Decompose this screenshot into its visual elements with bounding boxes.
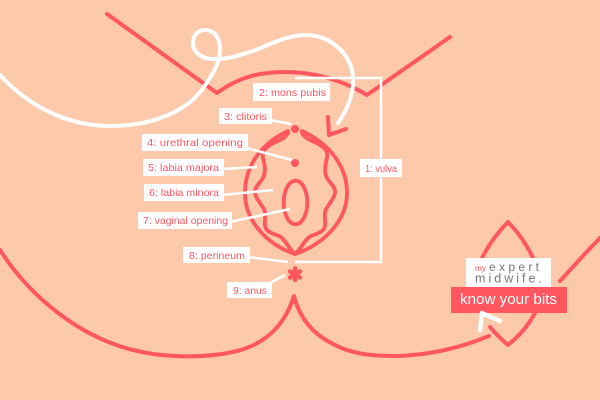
logo panel: my bbox=[475, 264, 486, 273]
label: 3 clitoris bbox=[219, 108, 272, 124]
label: 1 vulva bbox=[360, 159, 402, 177]
white swoosh arrow line bbox=[0, 30, 353, 126]
vaginal opening bbox=[284, 181, 307, 224]
label: 5 labia majora bbox=[143, 159, 224, 176]
outer labia outline bbox=[245, 131, 347, 254]
label: 7 vaginal opening bbox=[138, 212, 232, 229]
label: 2 mons pubis: 2: mons pubis bbox=[259, 87, 326, 99]
logo panel: expert bbox=[489, 260, 540, 274]
body outline: hips bbox=[107, 14, 450, 95]
arrowhead: red bbox=[328, 117, 346, 135]
white arrowhead bbox=[480, 313, 500, 330]
label: 1 vulva: 1: vulva bbox=[365, 163, 397, 175]
know your bits banner bbox=[451, 287, 567, 313]
right inner labia bbox=[295, 133, 335, 254]
label: 8 perineum: 8: perineum bbox=[189, 250, 245, 262]
label: 4 urethral opening: 4: urethral opening bbox=[147, 137, 243, 149]
urethral opening dot bbox=[291, 159, 299, 167]
label: 8 perineum bbox=[183, 247, 250, 263]
leader lines bbox=[222, 120, 292, 283]
label: 3 clitoris: 3: clitoris bbox=[224, 111, 267, 123]
label: 5 labia majora: 5: labia majora bbox=[148, 162, 219, 174]
label: 2 mons pubis bbox=[253, 83, 330, 101]
body outline: thighs and buttocks bbox=[0, 238, 600, 356]
label: 9 anus bbox=[227, 282, 272, 298]
raised leg leaf outline bbox=[482, 222, 535, 345]
label: 9 anus: 9: anus bbox=[233, 285, 267, 297]
clitoris dot bbox=[291, 125, 299, 133]
vulva diagram bbox=[245, 131, 347, 254]
label: 4 urethral opening bbox=[142, 134, 248, 151]
logo panel bbox=[466, 258, 551, 287]
label: 6 labia minora bbox=[144, 184, 224, 201]
label: 6 labia minora: 6: labia minora bbox=[149, 187, 219, 199]
label: 7 vaginal opening: 7: vaginal opening bbox=[143, 215, 228, 227]
vulva bracket line bbox=[295, 78, 381, 262]
logo panel: midwife. bbox=[475, 272, 542, 286]
anus asterisk bbox=[290, 268, 300, 280]
left inner labia bbox=[255, 133, 295, 254]
know your bits banner: know your bits bbox=[460, 291, 557, 308]
